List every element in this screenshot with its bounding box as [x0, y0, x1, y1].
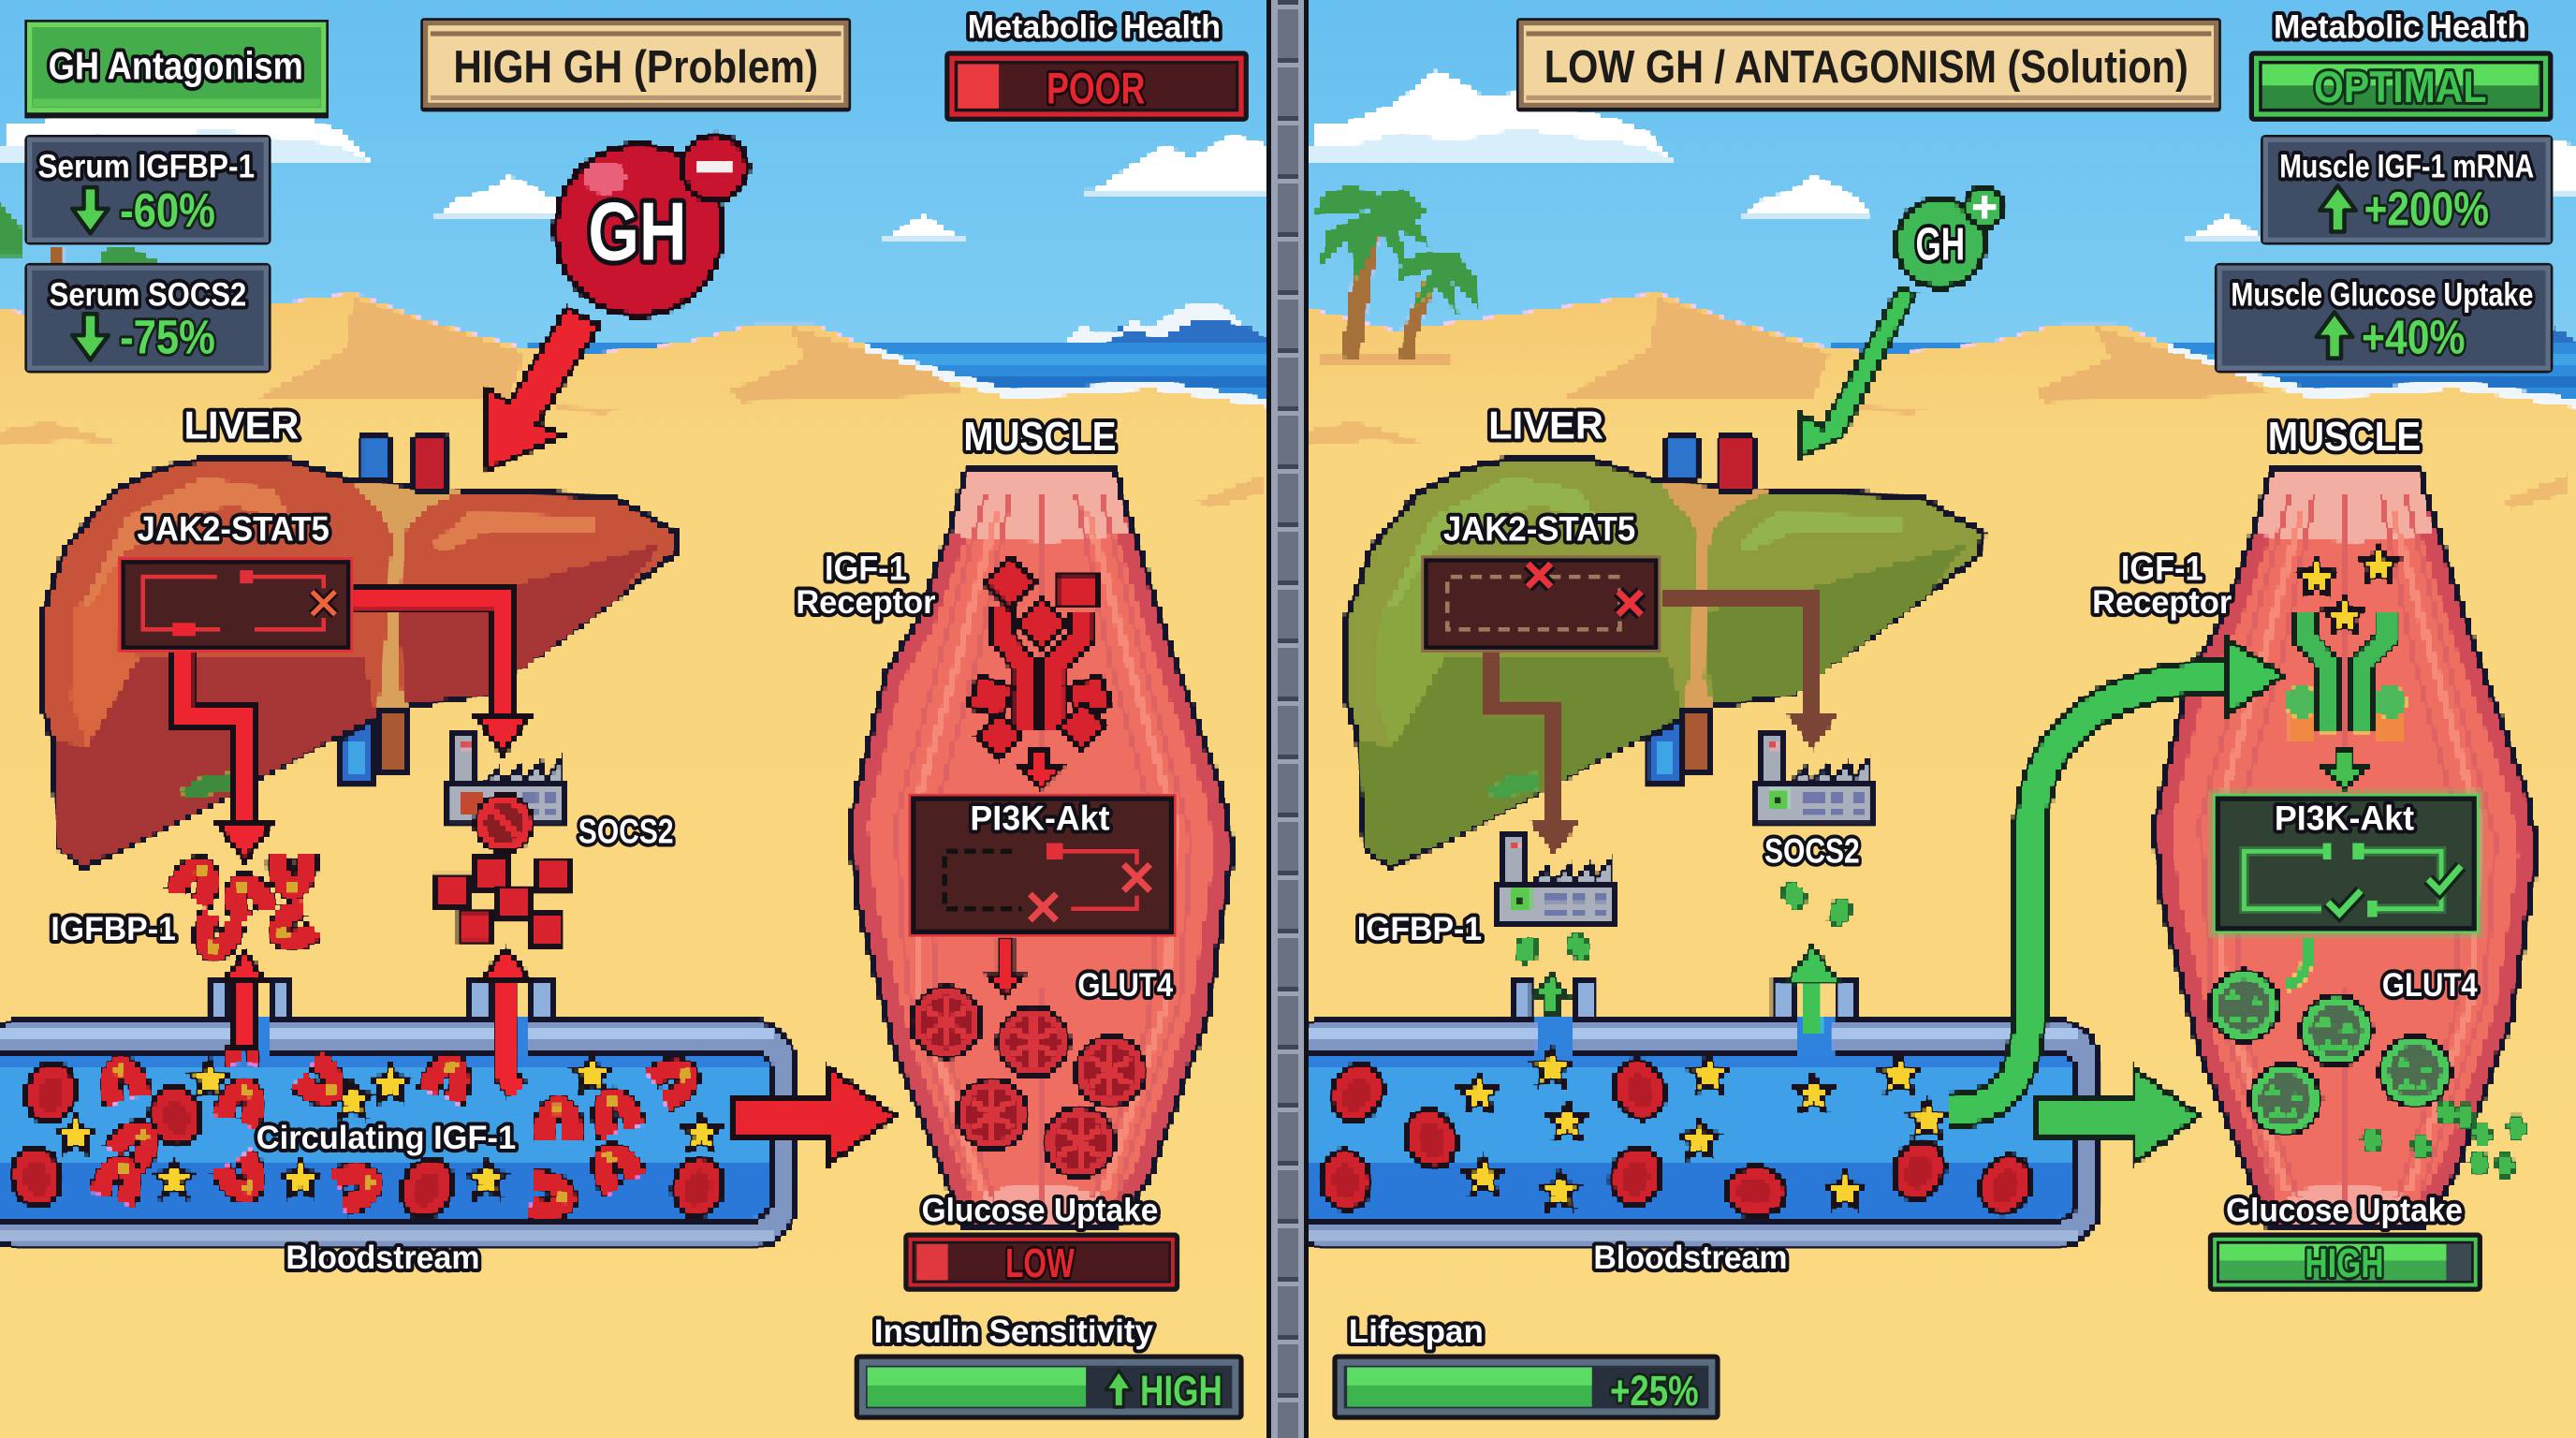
glucose particles	[2362, 1101, 2527, 1177]
meter: Glucose Uptake LOW: LOW	[1005, 1240, 1075, 1286]
labels and HUD: low GH	[1332, 8, 2553, 1420]
icon: factory SOCS2	[1756, 735, 1871, 825]
beach background	[1284, 0, 2576, 1438]
label: Bloodstream: Bloodstream	[1593, 1240, 1788, 1276]
meter: Lifespan +25%: +25%	[1610, 1367, 1699, 1415]
label: GLUT4: GLUT4	[2382, 967, 2478, 1004]
meter: Metabolic Health OPTIMAL	[2249, 8, 2553, 122]
stat card: Muscle IGF-1 mRNA	[2261, 135, 2553, 245]
label: GLUT4: GLUT4	[1077, 967, 1174, 1004]
label: LIVER: LIVER	[1488, 404, 1603, 448]
GLUT4 vesicles inactive	[909, 984, 1149, 1180]
SOCS2 protein squares	[437, 857, 568, 946]
arrow: PI3K to GLUT4 active	[2287, 938, 2307, 986]
stat card: Serum IGFBP-1: Serum IGFBP-1	[37, 149, 255, 185]
arrow: SOCS2 green up	[1786, 946, 1840, 1035]
liver: diseased red	[41, 437, 677, 868]
bound IGFBP-1 complexes in bloodstream	[99, 1039, 696, 1213]
GH label: GH	[588, 185, 687, 277]
meter: Glucose Uptake HIGH: HIGH	[2305, 1240, 2384, 1286]
bloodstream vessel	[0, 981, 795, 1247]
SOCS2 low particles	[1778, 879, 1857, 930]
stat card: Muscle Glucose Uptake	[2215, 263, 2553, 373]
meter: Metabolic Health POOR: Metabolic Health	[968, 8, 1221, 45]
panel: HIGH GH problem side	[0, 0, 1281, 1438]
liver: healthy green	[1347, 437, 1983, 868]
arrow: receptor to PI3K	[1018, 749, 1061, 789]
label: JAK2-STAT5: JAK2-STAT5	[138, 510, 329, 549]
label: SOCS2: SOCS2	[1764, 832, 1860, 871]
pathway box: PI3K-Akt active	[2208, 789, 2484, 938]
IGF-1 stars in bloodstream	[1458, 1047, 1948, 1210]
label: IGFBP-1: IGFBP-1	[1357, 911, 1482, 947]
IGFBP-1 low particles	[1510, 930, 1595, 967]
label: Receptor: Receptor	[796, 584, 936, 621]
arrow: PI3K to GLUT4	[989, 938, 1022, 998]
label: SOCS2: SOCS2	[578, 813, 674, 851]
meter: Lifespan +25%: Lifespan	[1349, 1313, 1484, 1350]
meter: Metabolic Health POOR	[944, 8, 1249, 122]
pixelated scene: high GH	[0, 0, 1281, 1438]
arrow: bloodstream to muscle	[2036, 1068, 2200, 1164]
arrow: faded JAK2-STAT5 to IGFBP-1	[1492, 638, 1580, 857]
label: Circulating IGF-1: Circulating IGF-1	[256, 1120, 516, 1156]
arrow: faded JAK2-STAT5 to SOCS2	[1661, 600, 1840, 751]
pathway box: PI3K-Akt blocked: PI3K-Akt	[970, 799, 1110, 837]
label: Receptor: Receptor	[2092, 584, 2232, 621]
meter: Insulin Sensitivity HIGH	[855, 1313, 1244, 1420]
arrow: JAK2-STAT5 to IGFBP-1	[184, 633, 272, 861]
IGFBP-1 protein cluster	[175, 855, 316, 957]
label: IGF-1: IGF-1	[2121, 550, 2203, 588]
icon: IGF-1 receptor blocked	[968, 558, 1112, 759]
meter: Insulin Sensitivity HIGH: Insulin Sensitivity	[874, 1313, 1154, 1350]
badge: GH Antagonism: GH Antagonism	[49, 43, 303, 87]
pathway box: PI3K-Akt blocked	[909, 794, 1177, 937]
label: Bloodstream: Bloodstream	[285, 1240, 479, 1276]
label: IGF-1 Receptor: IGF-1	[825, 550, 907, 588]
meter: Insulin Sensitivity HIGH: HIGH	[1140, 1367, 1222, 1415]
minus badge	[696, 161, 733, 172]
bloodstream vessel	[1281, 981, 2100, 1247]
stat card: Serum SOCS2: -75%	[120, 310, 215, 363]
label: LIVER: LIVER	[184, 404, 299, 448]
palm trees	[1312, 184, 1480, 365]
beach background	[0, 0, 1281, 1438]
muscle	[2154, 467, 2537, 1227]
meter: Metabolic Health OPTIMAL: Metabolic Health	[2274, 8, 2526, 45]
meter: Glucose Uptake HIGH: Glucose Uptake	[2226, 1192, 2463, 1228]
stat card: Serum IGFBP-1: -60%	[120, 183, 215, 237]
label: MUSCLE: MUSCLE	[963, 414, 1117, 460]
GLUT4 vesicles active	[2206, 968, 2452, 1137]
stat card: Serum SOCS2	[24, 263, 271, 373]
meter: Glucose Uptake HIGH	[2208, 1192, 2482, 1292]
pathway box: JAK2-STAT5	[118, 557, 353, 653]
label: MUSCLE: MUSCLE	[2268, 414, 2421, 460]
meter: Metabolic Health OPTIMAL: OPTIMAL	[2314, 63, 2486, 112]
label: IGFBP-1: IGFBP-1	[51, 911, 176, 947]
heading: HIGH GH (Problem)	[420, 18, 851, 111]
meter: Metabolic Health POOR: POOR	[1046, 65, 1145, 114]
stat card: Muscle IGF-1 mRNA: +200%	[2364, 182, 2489, 235]
badge: GH Antagonism	[24, 20, 329, 118]
red blood cells	[7, 1058, 730, 1225]
labels and HUD: high GH	[24, 8, 1249, 1420]
icon: blocked SOCS2 factory	[448, 735, 564, 855]
arrow: IGFBP-1 up from vessel	[225, 951, 265, 1047]
pathway box: PI3K-Akt active: PI3K-Akt	[2275, 799, 2414, 837]
arrow: GH to liver low	[1799, 287, 1915, 457]
GH label: GH	[1915, 219, 1965, 270]
GH hormone ball small	[1895, 187, 2004, 287]
meter: Glucose Uptake LOW: Glucose Uptake	[922, 1192, 1158, 1228]
red blood cells	[1316, 1053, 2041, 1222]
panel: LOW GH solution side	[1281, 0, 2576, 1438]
IGF-1 stars in bloodstream	[55, 1053, 722, 1198]
arrow: stars to receptor	[1950, 639, 2284, 1111]
stat card: Serum SOCS2: Serum SOCS2	[50, 277, 246, 314]
icon: factory IGFBP-1	[1499, 835, 1614, 925]
heading: LOW GH / ANTAGONISM (Solution)	[1516, 18, 2221, 111]
arrow: IGFBP-1 green small	[1534, 973, 1567, 1012]
arrow: SOCS2 up from vessel	[481, 948, 531, 1092]
heading: LOW GH / ANTAGONISM (Solution): LOW GH / ANTAGONISM (Solution)	[1544, 42, 2188, 93]
stat card: Muscle Glucose Uptake: +40%	[2362, 310, 2466, 363]
arrow: GH to liver	[485, 307, 600, 470]
arrow: JAK2-STAT5 to SOCS2	[352, 600, 531, 755]
label: JAK2-STAT5: JAK2-STAT5	[1443, 510, 1635, 549]
pixelated scene: low GH	[1281, 0, 2576, 1438]
muscle	[849, 467, 1232, 1227]
plus badge	[1973, 196, 1996, 218]
meter: Lifespan +25%	[1332, 1313, 1720, 1420]
stat card: Serum IGFBP-1	[24, 135, 271, 245]
arrow: bloodstream to muscle	[731, 1068, 896, 1164]
centre divider	[1266, 0, 1309, 1438]
palm tree behind stat cards	[0, 200, 161, 266]
GH hormone ball	[555, 135, 748, 315]
arrow: receptor to PI3K active	[2323, 749, 2365, 789]
meter: Glucose Uptake LOW	[903, 1192, 1179, 1292]
pathway box: JAK2-STAT5 inactive	[1421, 555, 1661, 653]
heading: HIGH GH (Problem): HIGH GH (Problem)	[453, 42, 818, 93]
icon: IGF-1 receptor active	[2285, 544, 2407, 742]
